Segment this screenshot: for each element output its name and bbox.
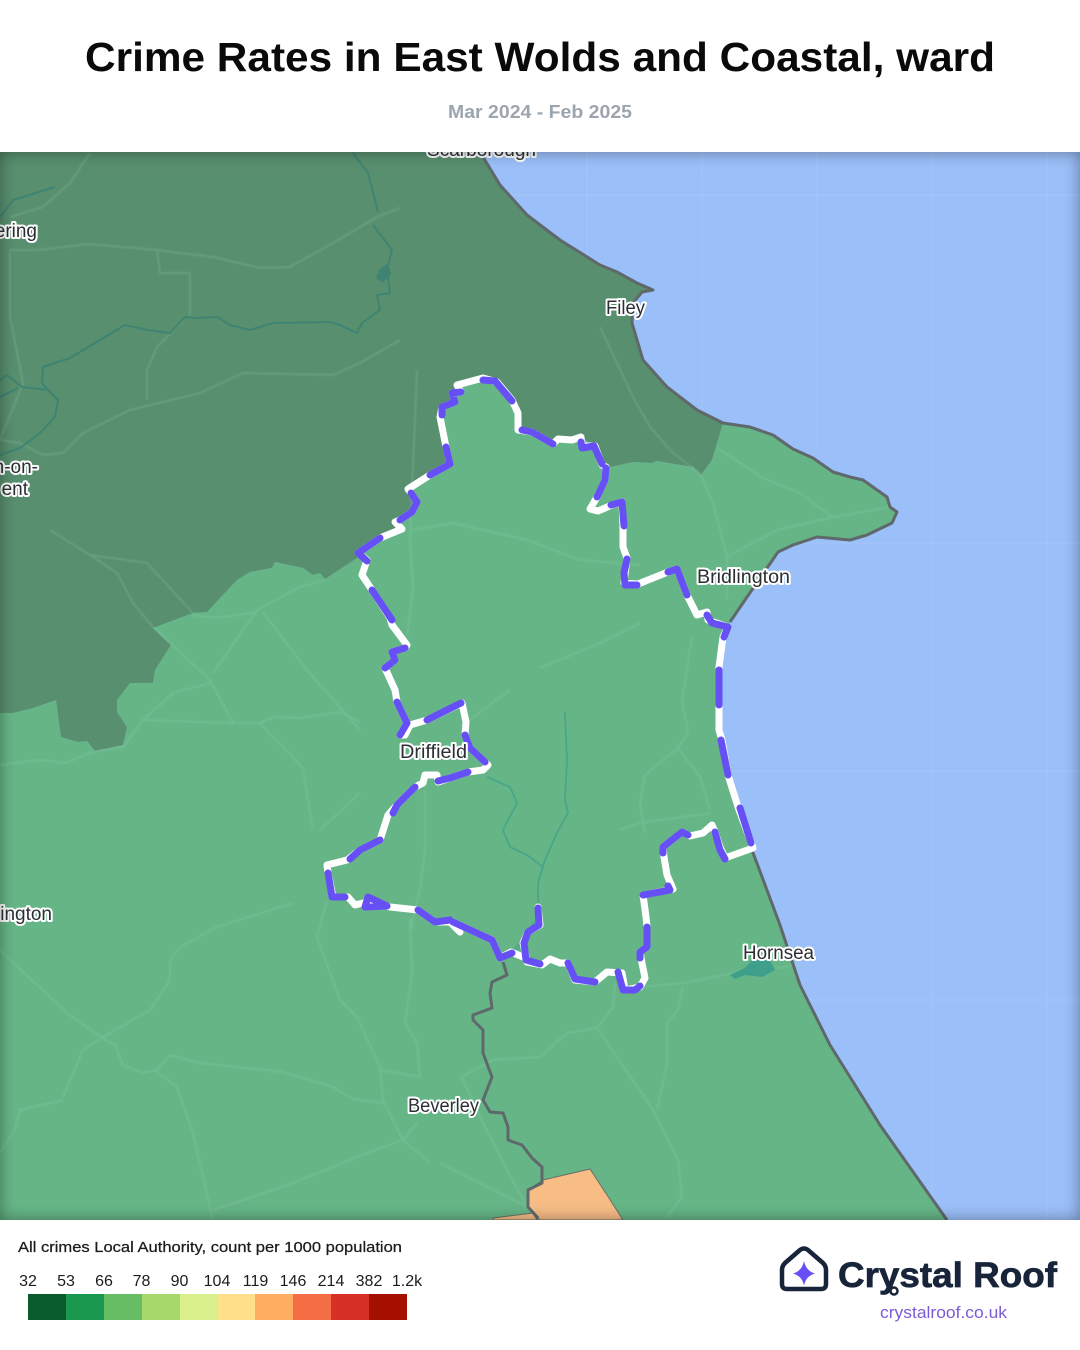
water bodies [376, 264, 775, 979]
land: light green local authority [0, 378, 947, 1220]
land: dark green neighbouring authority [0, 152, 723, 751]
label: Beverley: Beverley [408, 1096, 479, 1117]
label: Bridlington: Bridlington [697, 567, 790, 588]
legend scale labels: 119 [243, 1273, 268, 1290]
icon: house with star [782, 1248, 826, 1289]
label: Scarborough: Scarborough [427, 140, 536, 161]
subtitle: date range: Mar 2024 - Feb 2025 [448, 102, 632, 122]
legend scale labels [19, 1273, 423, 1290]
legend [18, 1239, 423, 1320]
legend scale labels: 104 [204, 1273, 230, 1290]
legend scale labels: 53 [57, 1273, 75, 1290]
legend scale labels: 382 [356, 1273, 382, 1290]
label: Filey: Filey [606, 298, 645, 319]
ward boundary: purple dashes [328, 380, 751, 990]
wordmark: Crystal Roof [838, 1256, 1057, 1295]
logo: Crystal Roof [782, 1248, 1057, 1322]
legend scale labels: 32 [19, 1273, 37, 1290]
ward boundary: white line [327, 378, 753, 990]
legend scale labels: 78 [133, 1273, 150, 1290]
label: Trent fragment: ent [2, 479, 29, 500]
legend scale labels: 66 [95, 1273, 113, 1290]
legend scale labels: 214 [318, 1273, 344, 1290]
legend scale labels: 1.2k [392, 1273, 423, 1290]
label: ington fragment: ington [0, 904, 52, 925]
label: Hornsea: Hornsea [743, 943, 814, 964]
coastline and authority boundary [473, 152, 947, 1220]
legend colour swatches [28, 1294, 407, 1320]
logo descender dot [890, 1288, 898, 1294]
place labels [0, 140, 814, 1117]
orange high-crime area [493, 1169, 623, 1220]
title: Crime Rates in East Wolds and Coastal, ward [85, 34, 995, 80]
label: Driffield: Driffield [400, 742, 467, 763]
rivers [0, 153, 392, 455]
legend title: All crimes Local Authority, count per 1000 population [18, 1239, 402, 1256]
legend scale labels: 146 [280, 1273, 306, 1290]
legend scale labels: 90 [171, 1273, 188, 1290]
website url: crystalroof.co.uk [880, 1304, 1008, 1322]
roads [0, 153, 890, 1220]
